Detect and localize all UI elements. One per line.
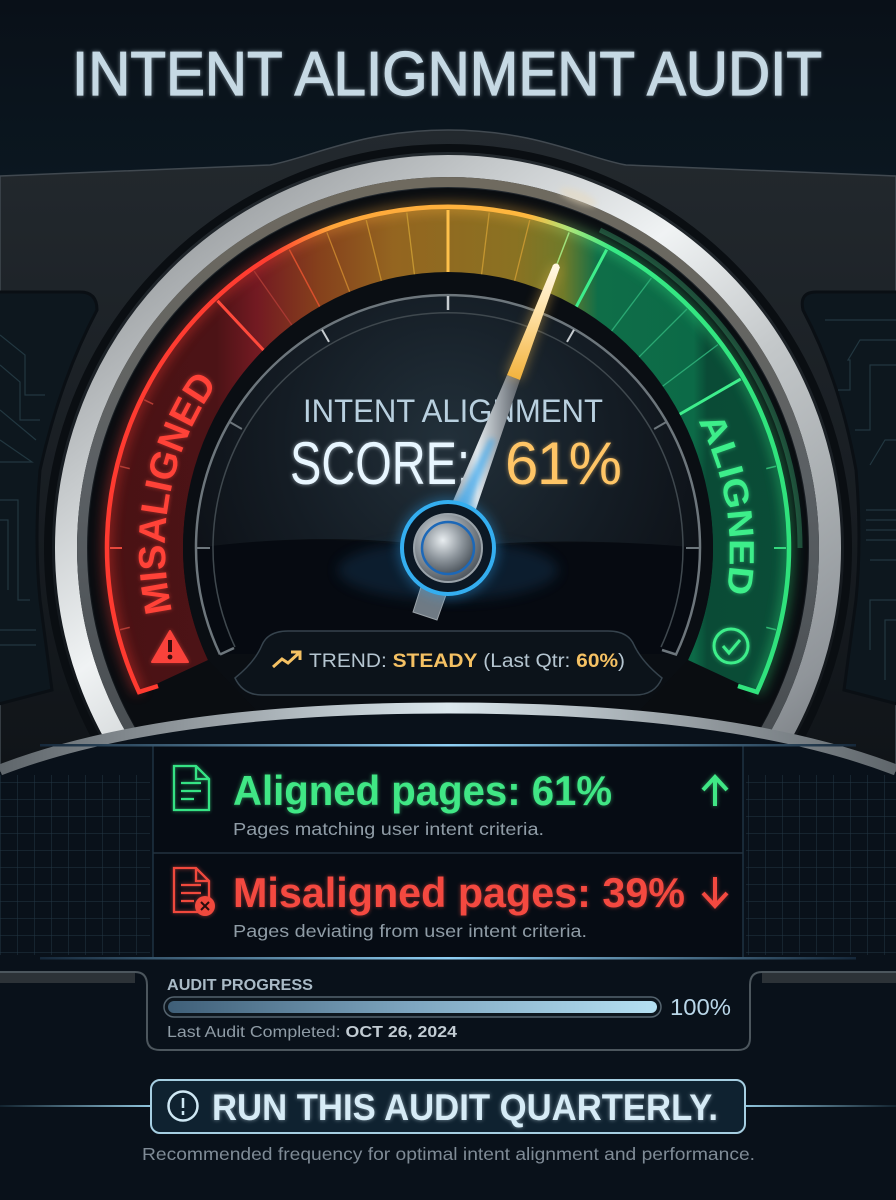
audit label: AUDIT PROGRESS (167, 977, 313, 994)
trend pill (235, 631, 662, 695)
grid left (0, 775, 150, 955)
callout: run quarterly (0, 1080, 896, 1133)
panel: dashboard housing (0, 130, 896, 800)
panel: right circuit inset (802, 292, 896, 705)
callout text: RUN THIS AUDIT QUARTERLY. (212, 1087, 718, 1128)
readout label: SCORE: (290, 430, 470, 497)
icon: warning triangle (152, 631, 188, 662)
grid right (746, 775, 896, 955)
panel: left circuit inset (0, 292, 97, 705)
readout caption: INTENT ALIGNMENT (303, 393, 603, 429)
label: aligned: ALIGNED (698, 418, 756, 596)
gauge bezel: chrome ring (48, 148, 848, 948)
progress value: 100% (670, 994, 731, 1020)
title: INTENT ALIGNMENT AUDIT (72, 40, 822, 109)
icon: up arrow (703, 777, 727, 806)
metal trim arc (0, 708, 896, 770)
needle hub (398, 498, 498, 598)
icon: down arrow (703, 877, 727, 906)
icon: check circle (714, 629, 748, 663)
icon: trend arrow (273, 652, 300, 667)
trend text: TREND: STEADY (Last Qtr: 60%) (309, 651, 625, 672)
icon: document (174, 766, 209, 810)
misaligned description: Pages deviating from user intent criteria. (233, 921, 587, 941)
readout value: 61% (505, 430, 622, 497)
lower console panel (0, 708, 896, 1200)
aligned heading: Aligned pages: 61% (233, 767, 612, 814)
label: misaligned: MISALIGNED (136, 372, 214, 616)
icon: document error (174, 868, 215, 916)
icon: alert circle (168, 1092, 198, 1120)
band: segment dividers (110, 210, 786, 630)
last audit date: Last Audit Completed: OCT 26, 2024 (167, 1024, 457, 1041)
footnote: Recommended frequency for optimal intent alignment and performance. (142, 1144, 755, 1164)
progress bar (164, 997, 661, 1017)
panel: audit progress (0, 972, 896, 1050)
misaligned heading: Misaligned pages: 39% (233, 869, 685, 916)
gauge dial face (183, 272, 713, 710)
gauge: colored scale band (94, 194, 801, 698)
dial rings and ticks (196, 295, 700, 654)
row: misaligned pages (174, 868, 727, 941)
band glow (107, 207, 789, 692)
aligned description: Pages matching user intent criteria. (233, 819, 544, 839)
needle (413, 264, 560, 620)
row: aligned pages (174, 766, 727, 839)
band edge arc (107, 207, 789, 692)
panel: page metrics (40, 744, 856, 960)
gauge readout text (290, 393, 622, 497)
